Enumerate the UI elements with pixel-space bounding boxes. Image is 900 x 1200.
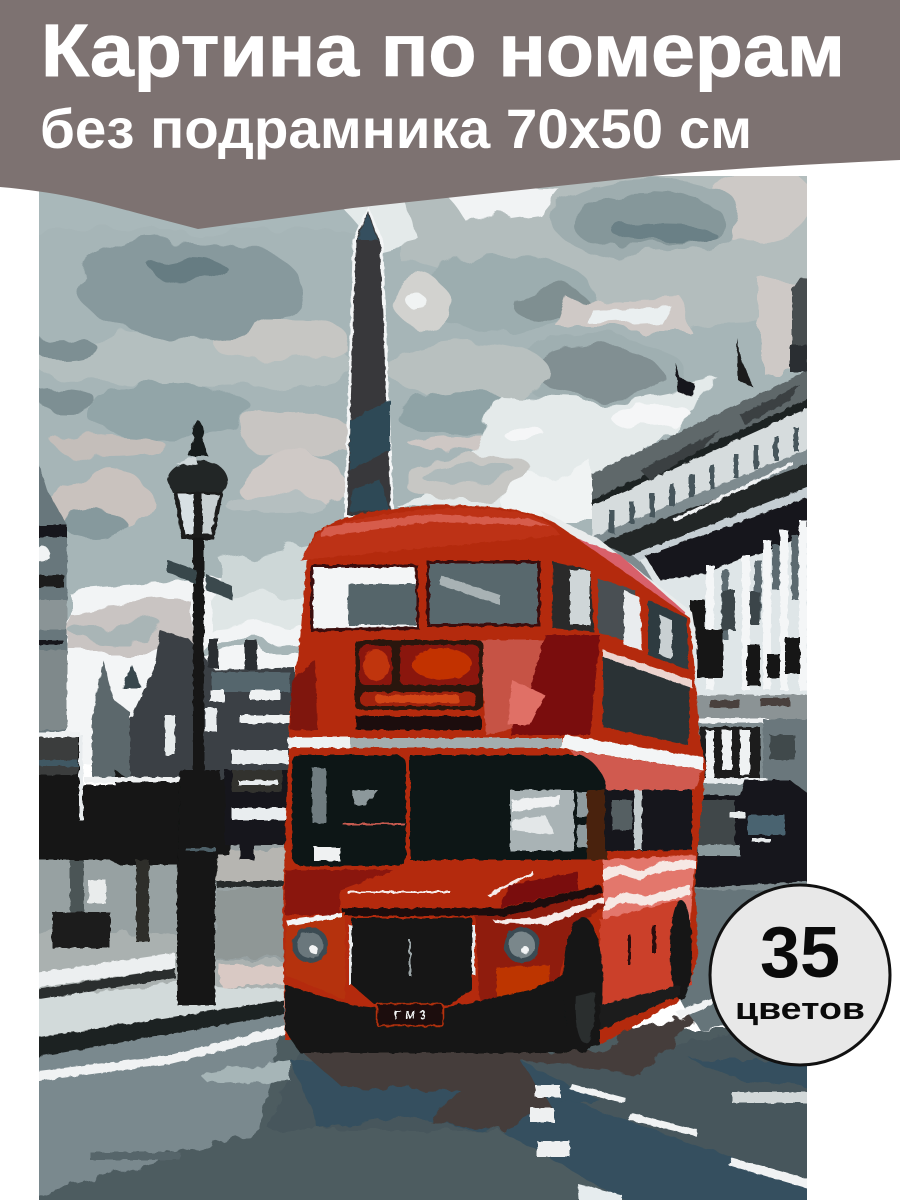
number plate [377,1004,443,1026]
painting: London bus [39,176,807,1200]
sky [39,176,807,764]
pavement [39,844,286,1037]
red double decker bus [283,505,706,1053]
parked cars [694,779,807,888]
subtitle: без подрамника 70х50 см [40,97,752,160]
right classical building [592,278,830,890]
bus roof highlight [554,522,698,650]
badge label: цветов [735,991,865,1026]
wheels [563,917,603,1053]
side saloon windows upper row [603,653,690,745]
kerbs and road [20,881,286,1002]
title: Картина по номерам [41,9,845,92]
headlights [292,927,328,963]
distant buildings [85,630,295,790]
destination display [355,640,483,710]
street dark mass and kiosks [20,732,288,948]
ledge [603,464,807,556]
red double decker bus: ГМ3 [394,1008,426,1022]
upper windows [312,566,418,630]
lower chassis [284,974,601,1054]
obelisk [344,206,394,517]
balustrade [592,408,807,536]
header banner [0,0,900,229]
radiator grille [352,918,472,1005]
badge: 35 colours [710,885,890,1065]
big ben tower [39,466,68,732]
flags [675,362,695,397]
bus body [283,505,706,1045]
badge number: 35 [760,913,840,993]
white band [288,738,562,748]
upper column zone [640,538,807,696]
street lamp [167,420,232,1005]
front lower body [285,870,410,915]
corner tower [791,278,807,362]
cornice [592,370,807,500]
lower ledges [695,695,810,719]
lower windows [292,755,406,866]
side panels [603,855,695,930]
road markings [20,998,822,1200]
